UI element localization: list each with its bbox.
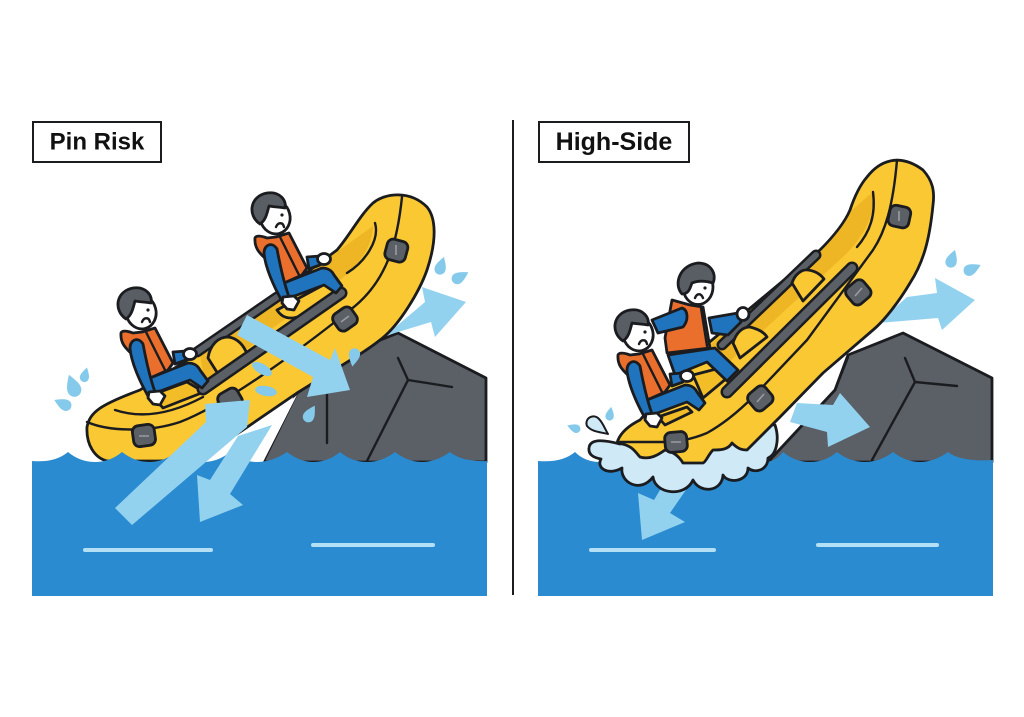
white gap between raft and rock [240, 395, 297, 462]
person: upper rafter [252, 193, 342, 310]
water [538, 452, 993, 596]
water [32, 452, 487, 596]
raft [617, 160, 934, 463]
current lines [85, 545, 433, 550]
arrow: downward current [638, 484, 690, 540]
rock [768, 333, 992, 462]
foam splash [589, 420, 777, 492]
raft [87, 195, 434, 461]
handles [132, 238, 409, 447]
arrow: long upstream current [115, 400, 250, 525]
label: Pin Risk [33, 122, 161, 162]
seats [208, 337, 247, 377]
current lines [591, 545, 937, 550]
far rail [722, 255, 816, 345]
panel: High-Side [538, 122, 993, 596]
person: lower rafter [118, 288, 208, 405]
thwart bar [203, 293, 341, 389]
far rail [197, 297, 277, 352]
label: High-Side [539, 122, 689, 162]
person: lower rafter [615, 310, 705, 427]
handles [664, 204, 912, 453]
arrow: downward current [197, 425, 272, 522]
panel: Pin Risk [32, 122, 487, 596]
seats [733, 327, 767, 358]
divider [512, 120, 514, 595]
person: upper rafter [652, 263, 749, 381]
water droplets [566, 248, 983, 434]
label: High-Side: High-Side [556, 128, 672, 156]
water droplets [52, 255, 471, 424]
arrow: force behind raft [878, 278, 975, 330]
rock [263, 333, 486, 462]
thwart bar [727, 268, 852, 392]
label: Pin Risk: Pin Risk [50, 128, 145, 156]
droplet with outline [586, 416, 608, 434]
arrow: force into rock [790, 393, 870, 447]
arrow: force behind raft [385, 287, 466, 337]
arrow: force onto rock [237, 315, 350, 397]
